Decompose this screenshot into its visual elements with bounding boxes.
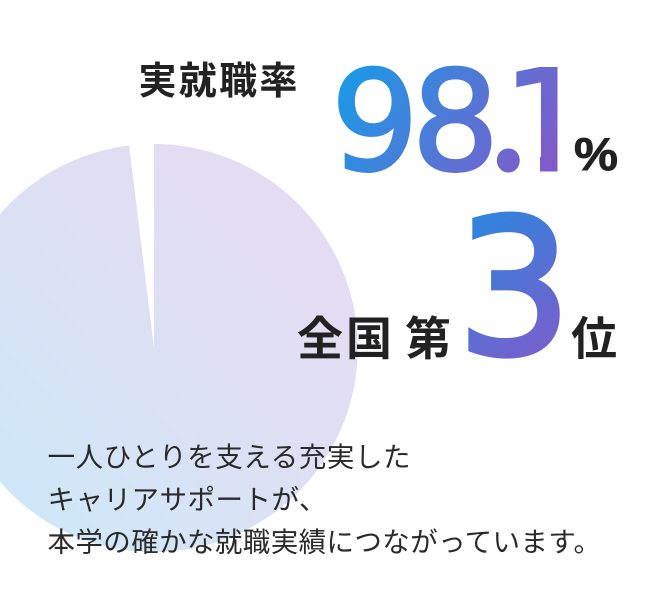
pie chart	[0, 144, 358, 552]
stat: ranked third nationwide: 第	[405, 313, 451, 365]
stat: 98.1 percent: 8	[412, 42, 499, 202]
stat: ranked third nationwide: 3	[457, 180, 572, 398]
stat: 98.1 percent	[338, 66, 618, 173]
description text: 本学の確かな就職実績につながっています。	[48, 526, 601, 558]
stat: ranked third nationwide	[297, 180, 617, 398]
stat: 98.1 percent: %	[574, 128, 618, 180]
stat: ranked third nationwide: 全国	[297, 313, 395, 365]
stat: 98.1 percent: 1	[502, 41, 592, 204]
heading: employment rate: 実就職率	[138, 61, 300, 103]
stat: 98.1 percent: 9	[331, 42, 419, 202]
description text: キャリアサポートが、	[48, 484, 327, 515]
stat: 98.1 percent: .	[488, 26, 529, 207]
stat: ranked third nationwide: 位	[571, 313, 617, 365]
description text	[48, 442, 601, 558]
description text: 一人ひとりを支える充実した	[48, 442, 411, 472]
